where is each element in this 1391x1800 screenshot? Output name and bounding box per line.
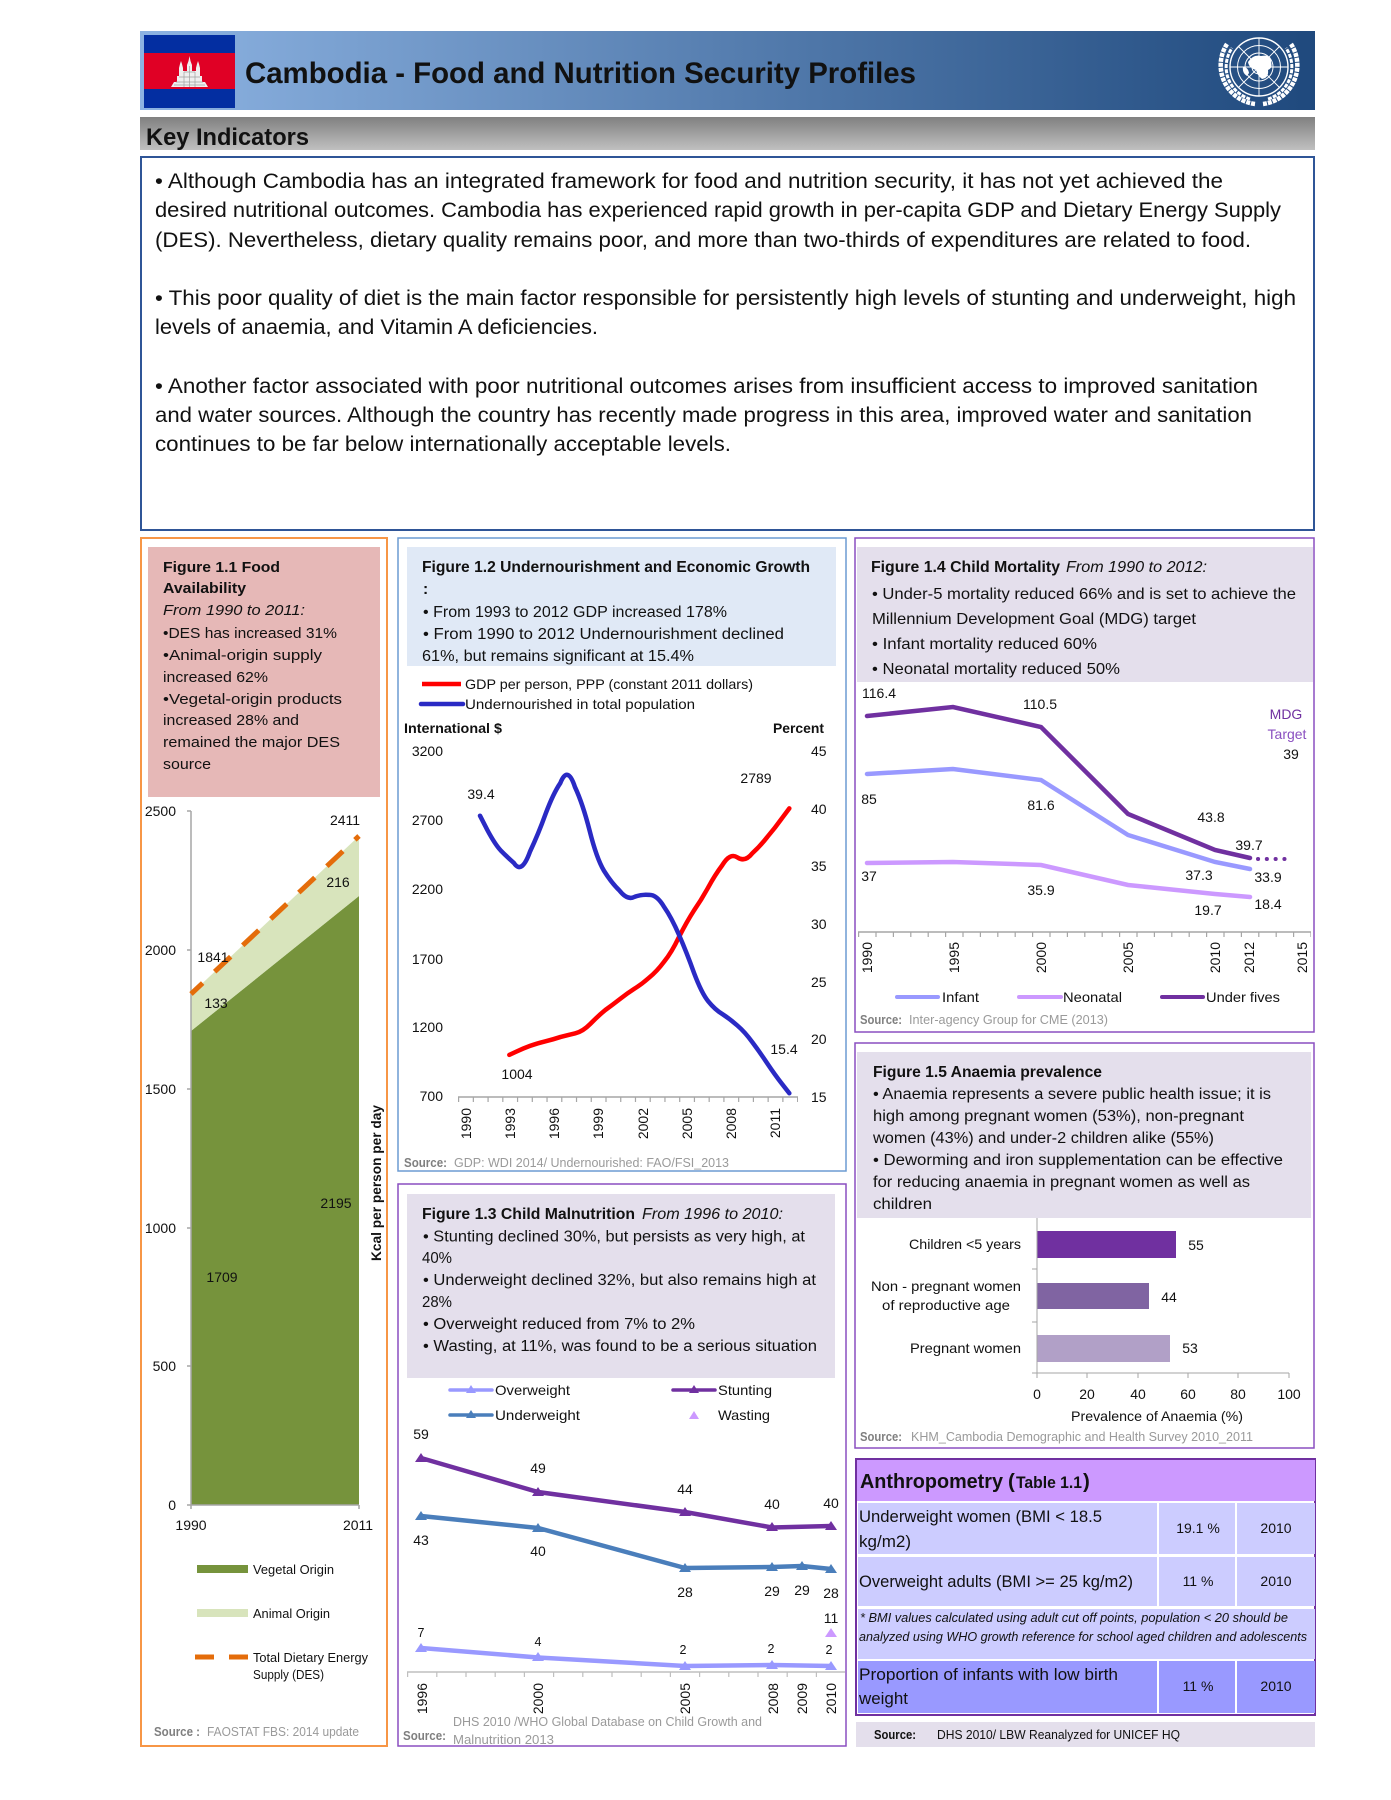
section heading: Key Indicators: [140, 117, 1315, 151]
chart: GDP and undernourishment lines: 2200: [412, 881, 443, 897]
legend: figure 1.2: GDP per person, PPP (constant 2011 dollars): [465, 676, 753, 692]
text block: figure 1.4 summary: [857, 547, 1313, 682]
table row: underweight women: kg/m2): [859, 1533, 911, 1551]
table row: low birth weight: 2010: [1260, 1678, 1292, 1694]
source: figure 1.5: KHM_Cambodia Demographic and Health Survey 2010_2011: [911, 1430, 1253, 1444]
chart: GDP and undernourishment lines: International $: [404, 720, 502, 736]
text block: figure 1.1 summary: increased 62%: [163, 669, 268, 686]
chart: GDP and undernourishment lines: 2700: [412, 812, 443, 828]
chart: stacked area dietary energy supply: 1990: [175, 1517, 207, 1533]
source: figure 1.1: FAOSTAT FBS: 2014 update: [207, 1725, 359, 1739]
legend: figure 1.4: Under fives: [1206, 989, 1280, 1005]
chart: anaemia bar chart: 44: [1161, 1289, 1177, 1305]
chart: child malnutrition lines: 4: [535, 1635, 542, 1649]
text block: figure 1.2 summary: [407, 547, 836, 666]
chart: GDP and undernourishment lines: 30: [811, 916, 827, 932]
table note: BMI values: analyzed using WHO growth reference for school aged children and adolescents: [859, 1629, 1307, 1644]
chart: GDP and undernourishment lines: 1990: [458, 1108, 474, 1139]
chart: child mortality lines: 2005: [1120, 942, 1136, 973]
chart: child malnutrition lines: 11: [824, 1610, 838, 1626]
chart: child mortality lines: 81.6: [1027, 797, 1055, 813]
chart: child mortality lines: 33.9: [1254, 869, 1282, 885]
chart: child malnutrition lines: 44: [677, 1481, 693, 1497]
panel: key indicators text: desired nutritional outcomes. Cambodia has experienced rapid growth in per-capita GDP and Dietary Energy Supply: [155, 198, 1281, 222]
text block: figure 1.5 summary: • Anaemia represents a severe public health issue; it is: [873, 1086, 1271, 1103]
panel: key indicators text: (DES). Nevertheless, dietary quality remains poor, and more than two-thirds of expenditures are related to food.: [155, 228, 1251, 252]
legend: figure 1.4: Neonatal: [1063, 989, 1122, 1005]
chart: GDP and undernourishment lines: 1999: [590, 1108, 606, 1139]
panel: key indicators text: levels of anaemia, and Vitamin A deficiencies.: [155, 315, 598, 339]
source: table 1.1: DHS 2010/ LBW Reanalyzed for UNICEF HQ: [937, 1727, 1180, 1742]
text block: figure 1.4 summary: Figure 1.4 Child Mortality: [871, 559, 1060, 576]
legend: figure 1.4: [897, 989, 1280, 1005]
table row: low birth weight: 11 %: [1183, 1678, 1213, 1694]
chart: GDP and undernourishment lines: 2005: [679, 1108, 695, 1139]
table row: underweight women: Underweight women (BMI < 18.5: [859, 1508, 1102, 1526]
chart: child mortality lines: 39.7: [1235, 837, 1263, 853]
chart: stacked area dietary energy supply: 0: [168, 1497, 176, 1513]
header banner: [140, 31, 1315, 110]
chart: child mortality lines: 1990: [859, 942, 875, 973]
table row: underweight women: [858, 1503, 1315, 1554]
chart: anaemia bar chart: 40: [1130, 1386, 1146, 1402]
chart: child malnutrition lines: 28: [823, 1585, 839, 1601]
text block: figure 1.3 summary: • Overweight reduced from 7% to 2%: [423, 1316, 695, 1333]
table row: overweight adults: 2010: [1260, 1573, 1292, 1589]
table row: low birth weight: weight: [858, 1690, 908, 1708]
chart: stacked area dietary energy supply: 1841: [197, 949, 229, 965]
chart: GDP and undernourishment lines: 1996: [546, 1108, 562, 1139]
text block: figure 1.2 summary: • From 1990 to 2012 Undernourishment declined: [423, 626, 784, 643]
chart: GDP and undernourishment lines: [404, 720, 827, 1139]
chart: GDP and undernourishment lines: 40: [811, 801, 827, 817]
text block: figure 1.2 summary: • From 1993 to 2012 GDP increased 178%: [423, 604, 727, 621]
text block: figure 1.4 summary: From 1990 to 2012:: [1066, 559, 1207, 576]
chart: GDP and undernourishment lines: 2008: [723, 1108, 739, 1139]
table note: BMI values: [858, 1609, 1315, 1659]
table: anthropometry: [856, 1459, 1315, 1715]
chart: child malnutrition lines: 40: [764, 1496, 780, 1512]
text block: figure 1.5 summary: • Deworming and iron supplementation can be effective: [873, 1152, 1283, 1169]
source: figure 1.3: [403, 1715, 762, 1747]
table row: overweight adults: [858, 1557, 1315, 1606]
chart: GDP and undernourishment lines: 45: [811, 743, 827, 759]
chart: child malnutrition lines: 1996: [414, 1683, 430, 1714]
chart: child mortality lines: 2010: [1207, 942, 1223, 973]
chart: child malnutrition lines: 40: [823, 1495, 839, 1511]
table heading: Table 1.1: [1016, 1474, 1082, 1492]
text block: figure 1.3 summary: Figure 1.3 Child Malnutrition: [422, 1206, 635, 1223]
text block: figure 1.3 summary: 40%: [422, 1250, 452, 1267]
chart: child mortality lines: 19.7: [1194, 902, 1222, 918]
text block: figure 1.5 summary: for reducing anaemia in pregnant women as well as: [873, 1174, 1250, 1191]
table row: overweight adults: Overweight adults (BMI >= 25 kg/m2): [859, 1573, 1133, 1591]
legend: figure 1.3: Overweight: [495, 1382, 570, 1398]
chart: GDP and undernourishment lines: 1200: [412, 1019, 443, 1035]
chart: stacked area dietary energy supply: 216: [326, 874, 350, 890]
panel: figure 1.1 food availability: [141, 538, 387, 1746]
text block: figure 1.1 summary: •Animal-origin supply: [163, 647, 323, 664]
chart: child malnutrition lines: 43: [413, 1532, 429, 1548]
chart: child malnutrition lines: 2008: [765, 1683, 781, 1714]
chart: GDP and undernourishment lines: 1700: [412, 951, 443, 967]
source: figure 1.2: Source:: [404, 1156, 447, 1170]
panel: key indicators text: • Although Cambodia has an integrated framework for food and nutrition security, it has not yet achieved the: [155, 169, 1223, 193]
text block: figure 1.1 summary: source: [163, 756, 211, 773]
chart: GDP and undernourishment lines: 2789: [740, 770, 772, 786]
table row: underweight women: 2010: [1260, 1520, 1292, 1536]
text block: figure 1.3 summary: 28%: [422, 1294, 452, 1311]
chart: GDP and undernourishment lines: 25: [811, 974, 827, 990]
chart: child mortality lines: 2012: [1241, 942, 1257, 973]
table row: overweight adults: 11 %: [1183, 1573, 1213, 1589]
text block: figure 1.1 summary: •DES has increased 31%: [163, 625, 337, 642]
chart: anaemia bar chart: 60: [1180, 1386, 1196, 1402]
table row: underweight women: 19.1 %: [1176, 1520, 1220, 1536]
text block: figure 1.5 summary: children: [873, 1196, 932, 1213]
panel: key indicators text: • This poor quality of diet is the main factor responsible for persistently high levels of stunting and underweight, high: [155, 286, 1296, 310]
panel: key indicators text: continues to be far below internationally acceptable levels.: [155, 432, 731, 456]
chart: anaemia bar chart: of reproductive age: [882, 1297, 1010, 1313]
legend: figure 1.1: Vegetal Origin: [253, 1563, 334, 1577]
chart: stacked area dietary energy supply: 2011: [343, 1517, 373, 1533]
chart: child malnutrition lines: 49: [530, 1460, 546, 1476]
table note: BMI values: * BMI values calculated using adult cut off points, population < 20 should be: [860, 1610, 1288, 1625]
chart: GDP and undernourishment lines: 35: [811, 858, 827, 874]
chart: child malnutrition lines: 2: [768, 1642, 775, 1656]
chart: GDP and undernourishment lines: 3200: [412, 743, 443, 759]
chart: stacked area dietary energy supply: Kcal per person per day: [369, 1105, 384, 1261]
chart: anaemia bar chart: Pregnant women: [910, 1340, 1021, 1356]
source: figure 1.3: DHS 2010 /WHO Global Database on Child Growth and: [453, 1715, 762, 1729]
text block: figure 1.5 summary: Figure 1.5 Anaemia prevalence: [873, 1064, 1102, 1081]
legend: figure 1.4: Infant: [942, 989, 979, 1005]
chart: child malnutrition lines: 28: [677, 1584, 693, 1600]
chart: stacked area dietary energy supply: 2195: [320, 1195, 352, 1211]
source: table 1.1: Source:: [874, 1727, 916, 1742]
chart: anaemia bar chart: 55: [1188, 1237, 1204, 1253]
chart: stacked area dietary energy supply: 1709: [206, 1269, 238, 1285]
source: figure 1.3: Malnutrition 2013: [453, 1733, 554, 1747]
panel: key indicators text: [141, 157, 1314, 530]
text block: figure 1.3 summary: • Stunting declined 30%, but persists as very high, at: [423, 1228, 806, 1246]
table row: low birth weight: [858, 1661, 1315, 1713]
source: figure 1.2: GDP: WDI 2014/ Undernourished: FAO/FSI_2013: [454, 1156, 729, 1170]
chart: child mortality lines: 2015: [1294, 942, 1310, 973]
legend: figure 1.1: Supply (DES): [253, 1668, 324, 1682]
legend: figure 1.3: [450, 1382, 772, 1423]
text block: figure 1.1 summary: increased 28% and: [163, 712, 299, 729]
legend: figure 1.3: Wasting: [718, 1407, 770, 1423]
chart: child malnutrition lines: 7: [418, 1626, 425, 1640]
chart: child mortality lines: 110.5: [1023, 696, 1057, 712]
chart: stacked area dietary energy supply: 133: [204, 995, 228, 1011]
text block: figure 1.1 summary: Figure 1.1 Food: [163, 559, 280, 576]
chart: GDP and undernourishment lines: 2011: [767, 1108, 783, 1138]
chart: GDP and undernourishment lines: 15.4: [770, 1041, 798, 1057]
chart: child mortality lines: MDG: [1270, 706, 1302, 722]
chart: child malnutrition lines: 2009: [794, 1683, 810, 1714]
text block: figure 1.1 summary: Availability: [163, 580, 247, 597]
source: figure 1.5: Source:: [860, 1430, 902, 1444]
text block: figure 1.1 summary: •Vegetal-origin products: [163, 691, 342, 708]
table heading: (: [1008, 1470, 1015, 1493]
text block: figure 1.4 summary: • Under-5 mortality reduced 66% and is set to achieve the: [872, 586, 1296, 603]
chart: GDP and undernourishment lines: 15: [811, 1089, 827, 1105]
chart: stacked area dietary energy supply: 2411: [330, 812, 360, 828]
text block: figure 1.5 summary: high among pregnant women (53%), non-pregnant: [873, 1108, 1245, 1125]
table heading: ): [1083, 1470, 1090, 1493]
chart: child malnutrition lines: 59: [413, 1426, 429, 1442]
chart: child mortality lines: 85: [861, 791, 877, 807]
chart: child malnutrition lines: 2010: [823, 1683, 839, 1714]
table row: low birth weight: Proportion of infants with low birth: [859, 1666, 1118, 1684]
chart: child malnutrition lines: 29: [794, 1582, 810, 1598]
legend: figure 1.1: Animal Origin: [253, 1607, 330, 1621]
chart: stacked area dietary energy supply: 1000: [145, 1220, 176, 1236]
panel: key indicators text: • Another factor associated with poor nutritional outcomes arises from insufficient access to improved sanitation: [155, 374, 1258, 398]
text block: figure 1.5 summary: [857, 1052, 1311, 1218]
chart: GDP and undernourishment lines: 1004: [501, 1066, 533, 1082]
chart: stacked area dietary energy supply: [145, 803, 384, 1533]
source: figure 1.1: Source :: [154, 1725, 200, 1739]
chart: anaemia bar chart: Non - pregnant women: [871, 1278, 1021, 1294]
chart: GDP and undernourishment lines: 1993: [502, 1108, 518, 1139]
chart: stacked area dietary energy supply: 2500: [145, 803, 176, 819]
table heading: [857, 1460, 1315, 1501]
chart: stacked area dietary energy supply: 500: [153, 1358, 176, 1374]
text block: figure 1.4 summary: • Neonatal mortality reduced 50%: [872, 661, 1120, 678]
chart: anaemia bar chart: Prevalence of Anaemia (%): [1071, 1408, 1243, 1424]
chart: child malnutrition lines: 2: [826, 1643, 833, 1657]
source: figure 1.4: Source:: [860, 1013, 902, 1027]
chart: child malnutrition lines: 2005: [677, 1683, 693, 1714]
chart: child mortality lines: [858, 685, 1311, 973]
chart: anaemia bar chart: 0: [1033, 1386, 1041, 1402]
legend: figure 1.1: [195, 1563, 369, 1682]
chart: child mortality lines: Target: [1268, 726, 1307, 742]
chart: child mortality lines: 1995: [946, 942, 962, 973]
text block: figure 1.3 summary: [407, 1194, 835, 1378]
chart: child malnutrition lines: [407, 1426, 845, 1714]
chart: child mortality lines: 2000: [1033, 942, 1049, 973]
chart: child mortality lines: 35.9: [1027, 882, 1055, 898]
chart: child mortality lines: 39: [1283, 746, 1299, 762]
panel: figure 1.3 child malnutrition: [398, 1184, 846, 1747]
text block: figure 1.3 summary: From 1996 to 2010:: [642, 1206, 783, 1223]
chart: child mortality lines: 43.8: [1197, 809, 1225, 825]
chart: child mortality lines: 37.3: [1185, 867, 1213, 883]
panel: figure 1.4 child mortality: [855, 538, 1314, 1032]
legend: figure 1.2: [421, 676, 753, 712]
chart: stacked area dietary energy supply: 2000: [145, 942, 176, 958]
source: table 1.1: [856, 1722, 1315, 1747]
chart: stacked area dietary energy supply: 1500: [145, 1081, 176, 1097]
text block: figure 1.3 summary: • Wasting, at 11%, was found to be a serious situation: [423, 1338, 817, 1355]
legend: figure 1.3: Underweight: [495, 1407, 580, 1423]
icon: Cambodia flag: [144, 35, 235, 108]
text block: figure 1.1 summary: [148, 547, 380, 797]
legend: figure 1.1: Total Dietary Energy: [253, 1651, 369, 1665]
panel: figure 1.5 anaemia prevalence: [855, 1043, 1314, 1448]
table heading: Anthropometry: [860, 1470, 1004, 1493]
chart: GDP and undernourishment lines: 39.4: [467, 786, 495, 802]
chart: GDP and undernourishment lines: 20: [811, 1031, 827, 1047]
panel: key indicators text: and water sources. Although the country has recently made progress in this area, improved water and sanitation: [155, 403, 1252, 427]
text block: figure 1.5 summary: women (43%) and under-2 children alike (55%): [872, 1130, 1214, 1147]
text block: figure 1.3 summary: • Underweight declined 32%, but also remains high at: [423, 1272, 817, 1289]
panel: figure 1.2 undernourishment and economic growth: [398, 538, 846, 1171]
chart: anaemia bar chart: 20: [1079, 1386, 1095, 1402]
text block: figure 1.1 summary: remained the major DES: [163, 734, 340, 751]
section heading: Key Indicators: Key Indicators: [146, 124, 309, 151]
chart: GDP and undernourishment lines: 700: [420, 1088, 443, 1104]
chart: child malnutrition lines: 29: [764, 1583, 780, 1599]
source: figure 1.4: Inter-agency Group for CME (2013): [909, 1013, 1108, 1027]
text block: figure 1.1 summary: From 1990 to 2011:: [163, 602, 305, 619]
chart: anaemia bar chart: 100: [1277, 1386, 1301, 1402]
chart: anaemia bar chart: Children <5 years: [909, 1236, 1021, 1252]
text block: figure 1.4 summary: • Infant mortality reduced 60%: [872, 636, 1097, 653]
chart: anaemia bar chart: 53: [1182, 1340, 1198, 1356]
chart: child malnutrition lines: 2: [680, 1643, 687, 1657]
text block: figure 1.4 summary: Millennium Development Goal (MDG) target: [872, 611, 1197, 628]
chart: anaemia bar chart: 80: [1230, 1386, 1246, 1402]
chart: child malnutrition lines: 2000: [530, 1683, 546, 1714]
chart: child mortality lines: 116.4: [862, 685, 896, 701]
text block: figure 1.2 summary: :: [423, 581, 428, 598]
chart: GDP and undernourishment lines: Percent: [773, 720, 824, 736]
text block: figure 1.2 summary: 61%, but remains significant at 15.4%: [422, 648, 694, 665]
legend: figure 1.3: Stunting: [718, 1382, 772, 1398]
chart: GDP and undernourishment lines: 2002: [635, 1108, 651, 1139]
chart: child mortality lines: 37: [861, 868, 877, 884]
legend: figure 1.2: Undernourished in total population: [465, 696, 695, 712]
source: figure 1.3: Source:: [403, 1729, 446, 1743]
chart: child malnutrition lines: 40: [530, 1543, 546, 1559]
icon: UN emblem: [1221, 38, 1297, 104]
chart: anaemia bar chart: [871, 1218, 1301, 1424]
text block: figure 1.2 summary: Figure 1.2 Undernourishment and Economic Growth: [422, 559, 810, 576]
chart: child mortality lines: 18.4: [1254, 896, 1282, 912]
title: Cambodia - Food and Nutrition Security Profiles: [245, 57, 916, 90]
